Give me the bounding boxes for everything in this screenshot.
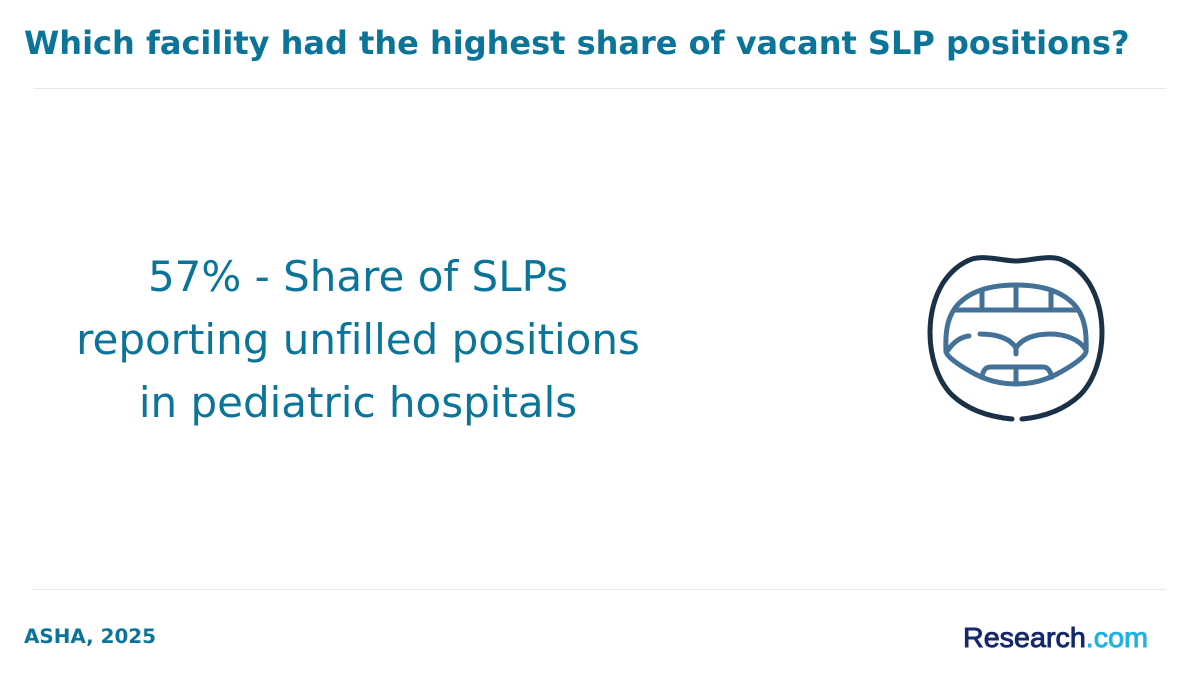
icon: inner mouth and teeth bbox=[946, 285, 1086, 384]
source: ASHA, 2025 bbox=[24, 625, 156, 648]
icon: outer lips outline bbox=[930, 258, 1102, 419]
logo: Research.com: Research.com bbox=[963, 622, 1148, 653]
title: Which facility had the highest share of vacant SLP positions? bbox=[24, 24, 1130, 62]
main statistic text: reporting unfilled positions bbox=[76, 315, 640, 364]
main statistic text: in pediatric hospitals bbox=[139, 378, 577, 427]
main statistic text bbox=[76, 252, 640, 427]
main statistic text: 57% - Share of SLPs bbox=[148, 252, 568, 301]
